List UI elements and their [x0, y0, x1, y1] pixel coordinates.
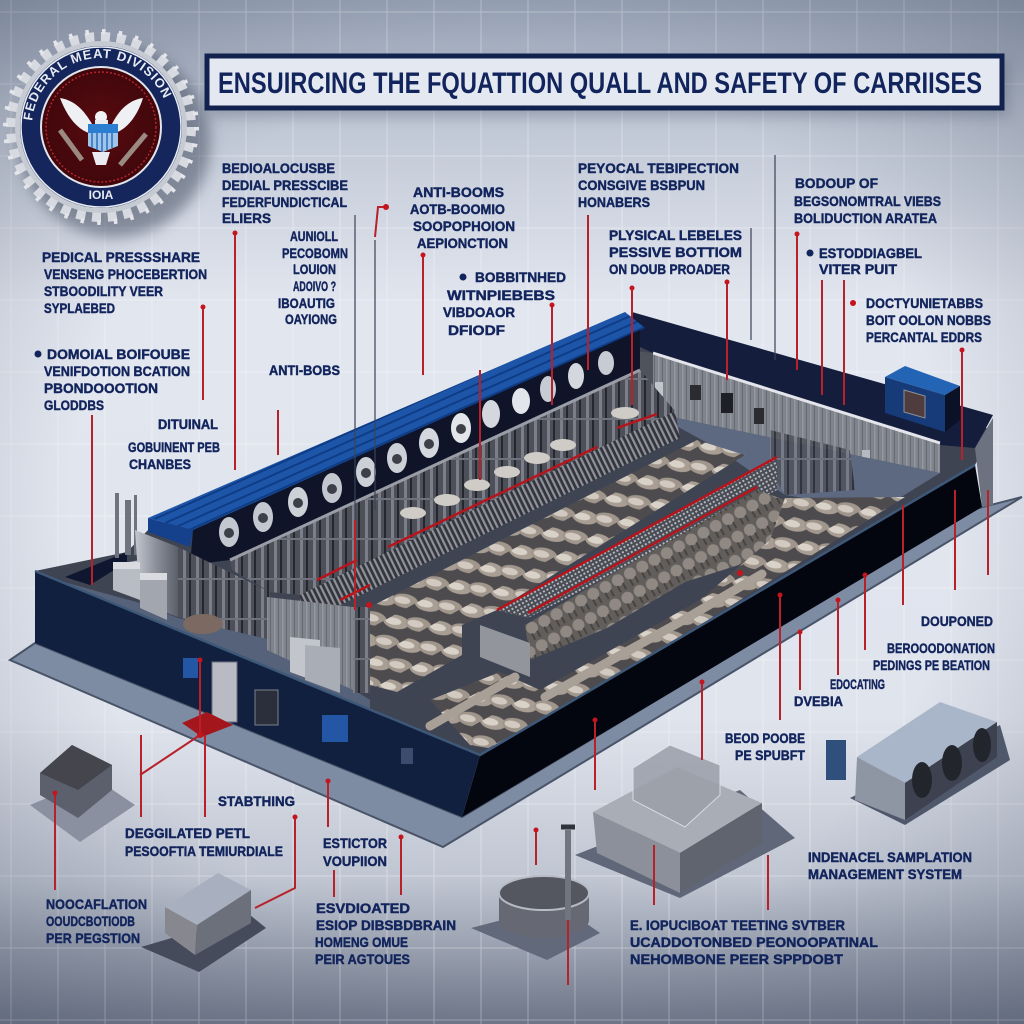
base slab — [10, 497, 1022, 847]
door — [212, 662, 237, 722]
label: doctyunietabbs — [866, 295, 991, 345]
label: edocating: DVEBIA — [794, 693, 843, 709]
vent unit — [30, 745, 135, 842]
label: pedical pressure: STBOODILITY VEER — [44, 283, 163, 299]
label: backup: BOLIDUCTION ARATEA — [794, 210, 937, 226]
label: water point: VITER PUIT — [819, 261, 897, 277]
label: estictor: VOUPIION — [323, 853, 387, 869]
label: physical labels: PESSIVE BOTTIOM — [609, 244, 742, 260]
label: annual: IBOAUTIG — [278, 295, 335, 311]
front right wall — [462, 465, 982, 817]
label: ditunal — [128, 416, 220, 472]
portrait band with portholes — [190, 330, 640, 565]
label: ditunal: GOBUINENT PEB — [128, 439, 220, 455]
label: douponed: DOUPONED — [921, 613, 993, 629]
label: bobbitnhed — [443, 269, 566, 338]
building: facility cutaway — [10, 312, 1022, 847]
label: water point — [819, 245, 922, 277]
label: backup: BEGSONOMTRAL VIEBS — [794, 193, 941, 209]
label: pedical pressure: PEDICAL PRESSSHARE — [42, 249, 200, 265]
label: anti-booms — [410, 184, 515, 251]
label: beroodonation: BEROOODONATION — [887, 640, 995, 656]
label: domoial: VENIFDOTION BCATION — [44, 363, 190, 379]
carcass spines — [430, 574, 762, 726]
label: starting: STABTHING — [218, 793, 295, 809]
label: testing system: UCADDOTONBED PEONOOPATINAL — [630, 934, 878, 950]
label: esvdioated: ESIOP DIBSBDBRAIN — [316, 917, 456, 933]
glass partition — [230, 370, 675, 595]
label: domoial — [44, 346, 190, 413]
label: testing system — [630, 917, 878, 967]
carcass field two — [430, 497, 905, 750]
blue roof strip — [148, 312, 645, 530]
label: top left stack: FEDERFUNDICTICAL — [222, 194, 347, 210]
left metal wall — [135, 530, 178, 617]
label: ditunal: DITUINAL — [158, 416, 218, 432]
label: anti-booms: SOOPOPHOION — [413, 218, 515, 234]
label: physical labels: ON DOUB PROADER — [609, 261, 730, 277]
label: estictor: ESTICTOR — [323, 835, 387, 851]
brown animal — [183, 614, 223, 634]
ribbed conveyor tube — [300, 411, 680, 625]
floor — [35, 330, 993, 755]
label: bead probe: PE SPUBFT — [735, 747, 805, 763]
title banner — [207, 56, 1008, 116]
label: esvdioated — [315, 900, 456, 967]
label: esvdioated: ESVDIOATED — [316, 900, 410, 916]
left exhaust pipes — [115, 493, 137, 558]
label: ventilation: PER PEGSTION — [46, 930, 140, 946]
right fence — [770, 430, 855, 495]
label: anti-booms: AOTB-BOOMIO — [410, 201, 505, 217]
label: backup: BODOUP OF — [795, 175, 878, 191]
label: water point: ESTODDIAGBEL — [819, 245, 922, 261]
label: dedicated — [125, 825, 283, 859]
label: doctyunietabbs: DOCTYUNIETABBS — [866, 295, 983, 311]
generator box — [141, 873, 266, 972]
label: ventilation — [46, 896, 147, 946]
label: physical temperature: HONABERS — [578, 194, 650, 210]
label: beroodonation — [873, 640, 995, 673]
label: anti-booms: AEPIONCTION — [417, 235, 508, 251]
front left wall — [35, 571, 480, 817]
label: estictor — [323, 835, 387, 869]
label: annual: PECOBOMN — [282, 245, 348, 261]
small animals on partition — [400, 407, 639, 519]
left fence — [178, 547, 270, 642]
label: management system: MANAGEMENT SYSTEM — [808, 866, 962, 882]
label: domoial: GLODDBS — [44, 397, 104, 413]
testing machine cluster — [575, 745, 795, 898]
left units — [113, 560, 167, 620]
standing sheep row — [525, 490, 785, 660]
label: annual — [278, 228, 348, 327]
eagle — [60, 98, 146, 165]
red rails — [317, 414, 777, 613]
label: top left stack — [222, 160, 348, 226]
label: doctyunietabbs: PERCANTAL EDDRS — [866, 329, 982, 345]
label: bead probe — [725, 730, 805, 763]
right floor — [653, 413, 940, 510]
label: ventilation: OOUDCBOTIODB — [46, 913, 135, 929]
label: testing system: E. IOPUCIBOAT TEETING SVTBER — [630, 917, 845, 933]
seal emblem: IOIA — [89, 188, 114, 202]
carcass field one — [370, 440, 745, 692]
rear navy band — [625, 312, 993, 448]
label: ditunal: CHANBES — [129, 456, 191, 472]
divider panel — [480, 625, 530, 677]
label: anti-robs: ANTI-BOBS — [269, 362, 340, 378]
cooling units — [850, 702, 1010, 825]
label: backup — [794, 175, 941, 226]
label: annual: LOUION — [293, 261, 336, 277]
water tank — [471, 827, 600, 960]
label: testing system: NEHOMBONE PEER SPPDOBT — [630, 951, 843, 967]
rail conveyor — [497, 457, 777, 618]
label: domoial: DOMOIAL BOIFOUBE — [47, 346, 190, 362]
seal emblem — [3, 29, 218, 245]
label: annual: ADOIVO ? — [293, 278, 336, 294]
label: edocating: EDOCATING — [830, 676, 885, 692]
label: management system: INDENACEL SAMPLATION — [808, 849, 972, 865]
label: bead probe: BEOD POOBE — [725, 730, 805, 746]
label: top left stack: ELIERS — [222, 210, 271, 226]
label: bobbitnhed: VIBDOAOR — [443, 304, 515, 320]
label: bobbitnhed: WITNPIEBEBS — [447, 287, 555, 303]
wall fixtures — [655, 382, 870, 466]
label: annual: AUNIOLL — [290, 228, 338, 244]
label: management system — [808, 849, 972, 882]
label: top left stack: BEDIOALOCUSBE — [222, 160, 335, 176]
label: doctyunietabbs: BOIT OOLON NOBBS — [866, 312, 991, 328]
label: esvdioated: PEIR AGTOUES — [315, 951, 410, 967]
label: bobbitnhed: BOBBITNHED — [475, 269, 566, 285]
label: edocating — [794, 676, 885, 709]
label: annual: OAYIONG — [285, 311, 337, 327]
label: dedicated: DEGGILATED PETL — [125, 825, 250, 841]
callout dots — [52, 204, 964, 840]
label: esvdioated: HOMENG OMUE — [315, 934, 408, 950]
label: top left stack: DEDIAL PRESSCIBE — [222, 177, 348, 193]
label: pedical pressure — [42, 249, 207, 316]
red entrance mat — [182, 712, 233, 737]
text dots — [34, 250, 814, 358]
label: physical labels: PLYSICAL LEBELES — [609, 227, 742, 243]
label: physical labels — [609, 227, 742, 277]
label: beroodonation: PEDINGS PE BEATION — [873, 657, 990, 673]
seal emblem: FEDERAL MEAT DIVISION — [23, 49, 172, 120]
label: pedical pressure: SYPLAEBED — [44, 300, 115, 316]
label: bobbitnhed: DFIODF — [448, 322, 505, 338]
label: anti-booms: ANTI-BOOMS — [413, 184, 504, 200]
front unit bank — [267, 597, 370, 693]
left rear strip — [65, 552, 127, 585]
label: physical temperature: PEYOCAL TEBIPECTION — [578, 160, 739, 176]
rear metal wall — [653, 353, 940, 473]
label: dedicated: PESOOFTIA TEMIURDIALE — [125, 843, 283, 859]
blue utility box — [885, 366, 960, 432]
left blue floor — [60, 581, 370, 709]
label: physical temperature — [578, 160, 739, 210]
label: pedical pressure: VENSENG PHOCEBERTION — [44, 266, 207, 282]
small blue box — [826, 740, 846, 780]
label: physical temperature: CONSGIVE BSBPUN — [578, 177, 705, 193]
wall signs — [183, 658, 413, 764]
right side post — [975, 418, 993, 507]
callout leader lines — [55, 155, 988, 985]
label: domoial: PBONDOOOTION — [44, 380, 158, 396]
label: ventilation: NOOCAFLATION — [46, 896, 147, 912]
